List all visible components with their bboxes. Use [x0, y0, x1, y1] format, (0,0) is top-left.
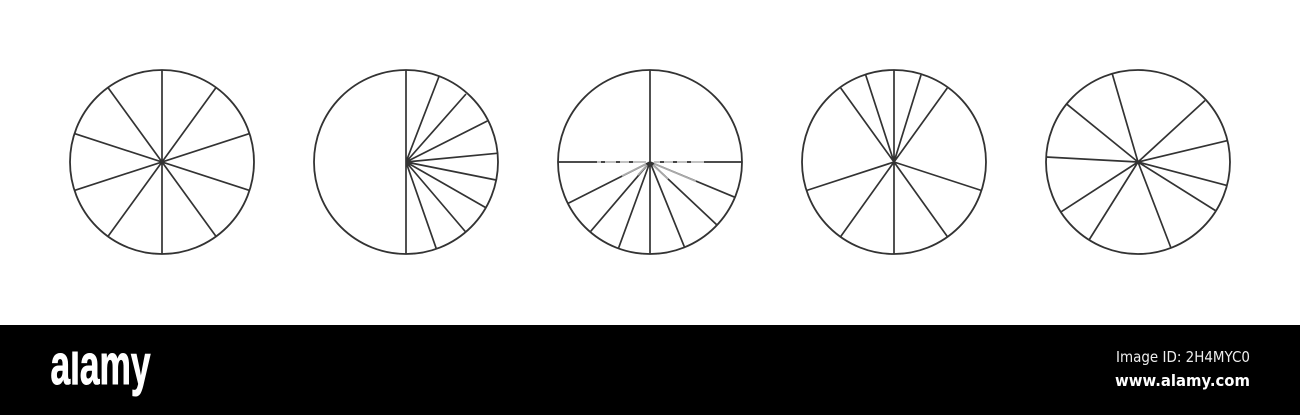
pie outline 4: ten unequal segments: [802, 70, 986, 254]
black footer band: [0, 325, 1300, 415]
pie outline 5: eleven irregular segments: [1046, 70, 1230, 254]
pie outline 2: half circle and ten small segments: [314, 70, 498, 254]
pie outline 1: ten equal segments: [70, 70, 254, 254]
pie outline 3: two quarters and eight small segments: [558, 70, 742, 254]
image id text: Image ID: 2H4MYC0: [1116, 348, 1250, 366]
website text: www.alamy.com: [1115, 371, 1250, 390]
alamy logo wordmark: alamy: [50, 333, 151, 397]
